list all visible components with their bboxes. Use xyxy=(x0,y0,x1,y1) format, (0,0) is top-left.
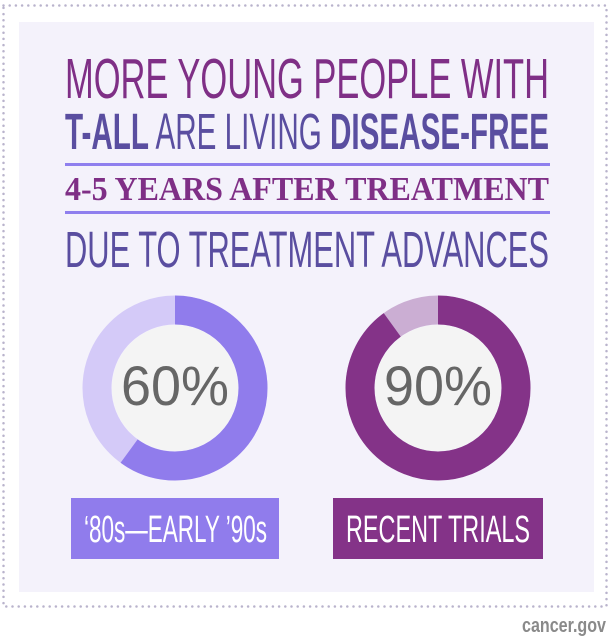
chart: donut 60% xyxy=(97,310,253,466)
label: recent trials xyxy=(333,498,543,559)
label: 80s-early 90s xyxy=(71,498,279,559)
chart: donut 90%: 90% xyxy=(384,354,492,417)
chart: donut 90% xyxy=(360,310,516,466)
chart: donut 60%: 60% xyxy=(121,354,229,417)
subtitle: 4-5 YEARS AFTER TREATMENT xyxy=(65,171,549,208)
label: 80s-early 90s: ‘80s—EARLY ’90s xyxy=(84,509,267,551)
